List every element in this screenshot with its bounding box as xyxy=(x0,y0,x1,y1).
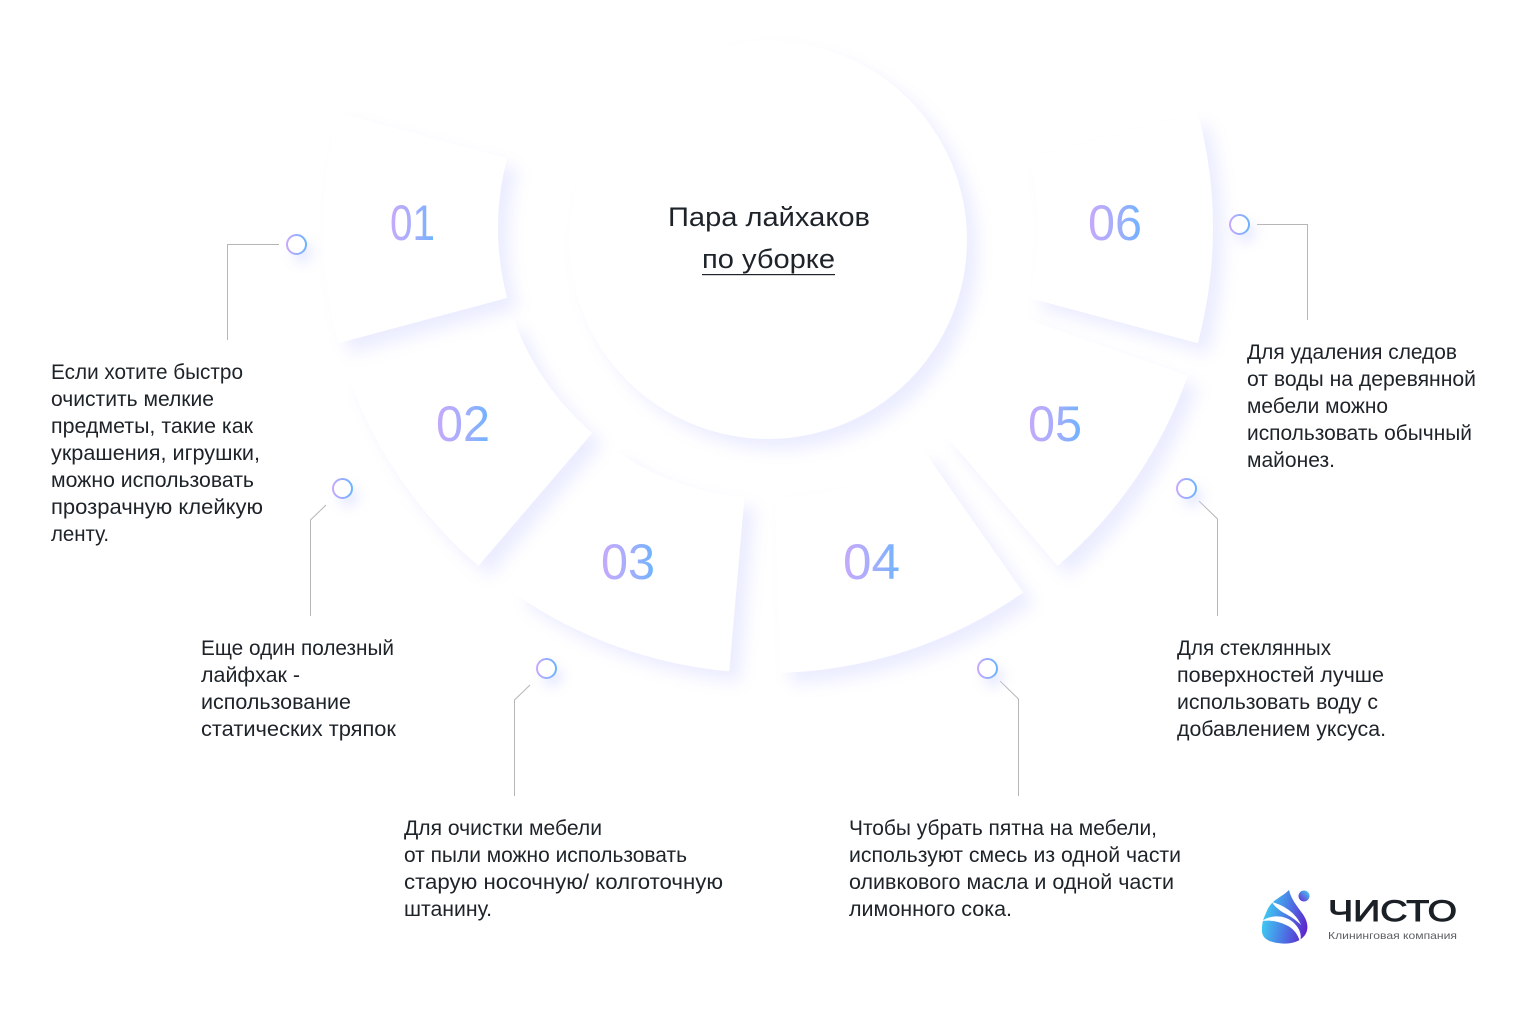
marker 04 xyxy=(978,659,997,678)
marker 06 xyxy=(1230,215,1249,234)
text block 01: очистить мелкие xyxy=(51,388,214,411)
text block 02: использование xyxy=(201,691,351,714)
text block 01: можно использовать xyxy=(51,469,254,492)
text block 02: Еще один полезный xyxy=(201,637,394,660)
text block 02: статических тряпок xyxy=(201,718,397,741)
text block 01: прозрачную клейкую xyxy=(51,496,263,519)
text block 01: предметы, такие как xyxy=(51,415,254,438)
number 03: 03 xyxy=(601,534,655,590)
segment 04 xyxy=(775,449,1023,673)
text block 06: майонез. xyxy=(1247,449,1335,472)
segment 06 xyxy=(1029,113,1213,343)
number 06: 06 xyxy=(1088,195,1142,251)
connector 03 xyxy=(514,685,530,796)
connector 04 xyxy=(1000,681,1018,796)
text block 01: ленту. xyxy=(51,523,109,546)
text block 05: поверхностей лучше xyxy=(1177,664,1384,687)
marker 05 xyxy=(1177,479,1196,498)
segment 01 xyxy=(323,113,507,343)
logo xyxy=(1262,890,1457,944)
title: Пара лайхаков xyxy=(668,202,870,232)
text block 04: лимонного сока. xyxy=(849,898,1012,921)
text block 06: Для удаления следов xyxy=(1247,341,1457,364)
text block 03: штанину. xyxy=(404,898,492,921)
number 04: 04 xyxy=(843,534,900,590)
icon: logo droplet xyxy=(1262,890,1310,944)
title xyxy=(668,202,870,275)
text block 03: Для очистки мебели xyxy=(404,817,602,840)
text block 05: использовать воду с xyxy=(1177,691,1378,714)
text block 05: Для стеклянных xyxy=(1177,637,1331,660)
logo wordmark: ЧИСТО xyxy=(1328,895,1457,928)
number 02: 02 xyxy=(436,396,490,452)
text block 04 xyxy=(849,817,1181,921)
text block 04: Чтобы убрать пятна на мебели, xyxy=(849,817,1157,840)
segment 02 xyxy=(348,318,592,566)
center circle xyxy=(569,41,967,439)
text block 03: от пыли можно использовать xyxy=(404,844,687,867)
marker 01 xyxy=(287,235,306,254)
text block 04: оливкового масла и одной части xyxy=(849,871,1174,894)
connector 06 xyxy=(1257,224,1308,320)
text block 06: мебели можно xyxy=(1247,395,1388,418)
text block 06 xyxy=(1247,341,1476,472)
logo tagline: Клининговая компания xyxy=(1328,930,1457,942)
connector 01 xyxy=(228,244,279,340)
number 05: 05 xyxy=(1028,396,1082,452)
marker 02 xyxy=(333,479,352,498)
connector 02 xyxy=(310,505,326,616)
text block 06: использовать обычный xyxy=(1247,422,1472,445)
connector 05 xyxy=(1199,501,1218,616)
text block 02: лайфхак - xyxy=(201,664,300,687)
text block 04: используют смесь из одной части xyxy=(849,844,1181,867)
number 01: 01 xyxy=(390,195,435,251)
text block 01: украшения, игрушки, xyxy=(51,442,260,465)
text block 03: старую носочную/ колготочную xyxy=(404,871,723,894)
segment 03 xyxy=(513,449,744,671)
segment 05 xyxy=(944,318,1188,566)
text block 02 xyxy=(201,637,397,741)
text block 01 xyxy=(51,361,263,546)
title: по уборке xyxy=(702,244,835,274)
text block 05 xyxy=(1177,637,1386,741)
marker 03 xyxy=(537,659,556,678)
text block 03 xyxy=(404,817,723,921)
text block 06: от воды на деревянной xyxy=(1247,368,1476,391)
text block 05: добавлением уксуса. xyxy=(1177,718,1386,741)
text block 01: Если хотите быстро xyxy=(51,361,243,384)
